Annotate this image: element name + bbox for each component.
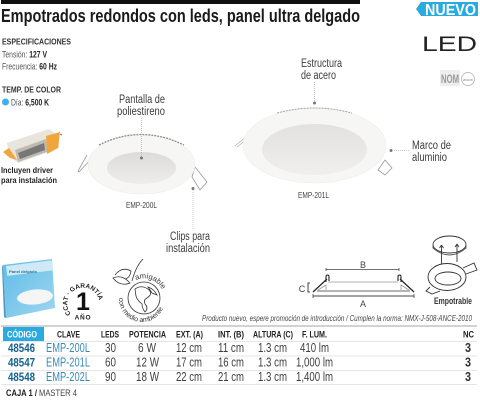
icon: color dot [2, 98, 9, 106]
label: EMP-201L: EMP-201L [298, 190, 329, 200]
dimension diagram: A [360, 299, 366, 309]
row 48548: 1,400 lm [296, 369, 333, 384]
row 48546: 6 W [138, 340, 157, 355]
row 48548: 18 W [136, 369, 160, 384]
row 48546: 11 cm [218, 340, 244, 355]
row 48548: 21 cm [218, 369, 244, 384]
row 48546 [8, 340, 471, 355]
row 48546: 12 cm [176, 340, 202, 355]
row 48547: 48547 [8, 356, 35, 370]
row 48547: 1,000 lm [296, 354, 333, 370]
panel: specifications [2, 36, 71, 108]
table header: NC [463, 330, 474, 340]
row 48548 [8, 369, 471, 384]
row 48548: 90 [105, 369, 116, 384]
row 48547: 12 W [136, 354, 160, 370]
row 48548: 48548 [8, 370, 35, 384]
row 48546: 3 [465, 340, 471, 355]
table header: LEDS [101, 330, 119, 340]
callout: clips para instalacion: Clips para [170, 231, 210, 243]
row 48547: 1.3 cm [258, 354, 287, 370]
callout: pantalla de poliestireno: poliestireno [117, 106, 165, 118]
callout: marco de aluminio: aluminio [412, 152, 447, 164]
heading: color temperature: TEMP. DE COLOR [2, 84, 61, 94]
footer: caja master: CAJA 1 / MASTER 4 [6, 388, 77, 399]
row 48547: 17 cm [176, 354, 202, 370]
eco seal: amigable [135, 273, 165, 289]
row 48548: 22 cm [176, 369, 202, 384]
warranty seal: 1 [76, 288, 90, 316]
heading: especificaciones: ESPECIFICACIONES [2, 36, 71, 46]
eco seal [112, 258, 165, 322]
row 48547: EMP-201L [46, 354, 90, 370]
row 48548: EMP-202L [46, 369, 90, 384]
row 48546: EMP-200L [46, 340, 90, 355]
callout: clips para instalacion: instalación [166, 243, 210, 255]
dimension diagram: B [360, 260, 366, 270]
lamp: EMP-200L [78, 134, 207, 194]
table header: POTENCIA [129, 330, 166, 340]
table [1, 326, 477, 384]
lamp: EMP-201L [235, 108, 392, 183]
icon: recessed mounting [426, 236, 477, 294]
driver caption: Incluyen driver [1, 165, 54, 175]
callout: estructura de acero: de acero [301, 70, 336, 82]
row 48547: 3 [465, 354, 471, 370]
row 48546: 410 lm [300, 340, 329, 355]
row 48547: 16 cm [218, 354, 244, 370]
product box: Panel delgado [9, 270, 37, 274]
row 48547: 60 [105, 354, 116, 370]
product box [2, 259, 55, 318]
warranty seal: AÑO [75, 312, 91, 322]
driver caption: para instalación [1, 175, 57, 185]
table header: CLAVE [57, 330, 80, 340]
voltage: Tensión: 127 V [2, 50, 47, 60]
row 48548: 1.3 cm [258, 369, 287, 384]
certification logos: ance [463, 77, 474, 82]
top bar [1, 0, 360, 4]
callout: estructura de acero: Estructura [301, 58, 342, 70]
row 48547 [8, 354, 471, 370]
driver caption [1, 165, 57, 185]
LED logo: LED [422, 33, 477, 56]
certification logos: NOM [441, 72, 459, 86]
warranty seal: CCAT · GARANTÍA [62, 283, 103, 316]
callout: marco de aluminio: Marco de [412, 140, 451, 152]
frequency: Frecuencia: 60 Hz [2, 62, 57, 72]
table header: INT. (B) [218, 330, 244, 340]
callout: pantalla de poliestireno [117, 94, 165, 160]
table header [3, 327, 474, 341]
eco seal: con medio ambiente [119, 298, 162, 322]
icon: LED driver [3, 129, 62, 163]
row 48546: 1.3 cm [258, 340, 287, 355]
callout: marco de aluminio [390, 140, 451, 164]
table header: CÓDIGO [7, 328, 37, 340]
row 48546: 48546 [8, 341, 35, 355]
callout: clips para instalacion [166, 187, 210, 255]
table header: EXT. (A) [176, 330, 203, 340]
dimension diagram: C [299, 284, 306, 294]
callout: estructura de acero [301, 58, 342, 104]
dimension diagram [299, 260, 414, 309]
daylight value: Día: 6,500 K [11, 98, 49, 108]
table header: F. LUM. [302, 330, 327, 340]
table header: ALTURA (C) [253, 330, 293, 340]
row 48548: 3 [465, 369, 471, 384]
callout: pantalla de poliestireno: Pantalla de [119, 94, 165, 106]
row 48546: 30 [105, 340, 116, 355]
label: EMP-200L: EMP-200L [126, 200, 157, 210]
title: Empotrados redondos con leds, panel ultra delgado [1, 5, 360, 26]
